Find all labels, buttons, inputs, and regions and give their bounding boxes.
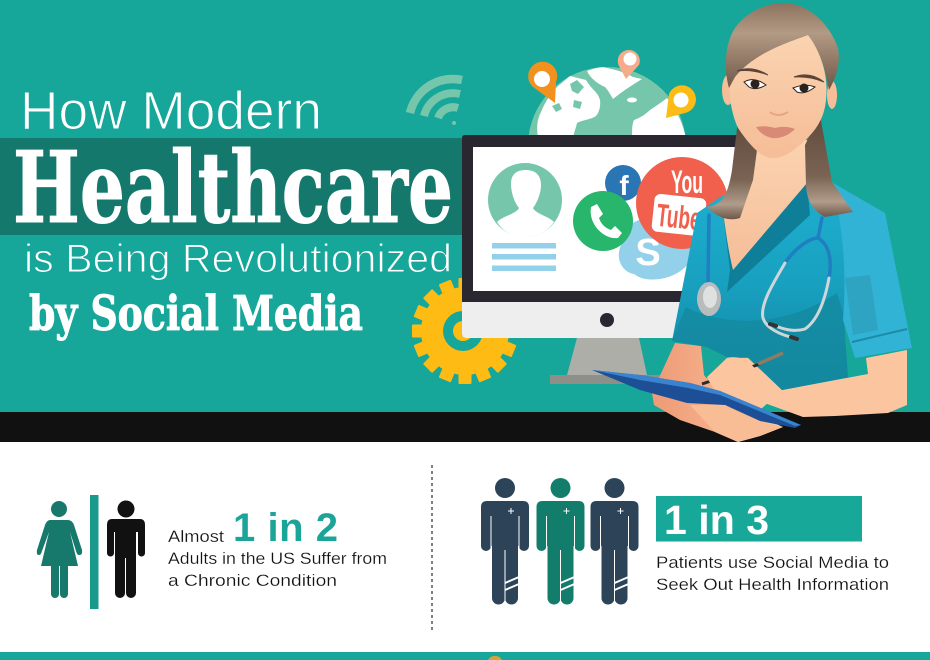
stat: 1 in 2: a Chronic Condition xyxy=(168,571,337,590)
divider xyxy=(431,465,433,630)
face xyxy=(729,35,827,158)
right arm xyxy=(707,350,907,417)
icon: location pin orange xyxy=(528,62,557,103)
icon: youtube: You xyxy=(671,164,703,200)
icon: patient 3 xyxy=(590,478,638,606)
monitor base xyxy=(550,375,670,384)
sleeve shade xyxy=(845,275,878,335)
scrub lower shade xyxy=(672,293,850,390)
left eyebrow xyxy=(737,69,768,75)
title xyxy=(13,81,453,342)
scrub torso xyxy=(672,180,890,390)
stat box: 1 in 3: 1 in 3 xyxy=(664,497,769,543)
stat: 1 in 2: Adults in the US Suffer from xyxy=(168,549,387,568)
icon: youtube: Tube xyxy=(655,197,703,237)
icon: skype: S xyxy=(635,232,661,274)
title: How Modern xyxy=(20,81,322,141)
header background xyxy=(0,0,930,413)
profile text lines xyxy=(492,243,556,271)
hair xyxy=(726,3,839,90)
icon: skype xyxy=(619,218,690,279)
icon: facebook xyxy=(605,165,641,201)
lips xyxy=(756,126,795,138)
stat text: patients: Seek Out Health Information xyxy=(656,575,889,594)
writing hand xyxy=(707,357,780,410)
icon: man xyxy=(107,500,145,598)
icon: patient 1 xyxy=(481,478,529,606)
stethoscope tubes xyxy=(708,215,830,339)
collar xyxy=(722,183,810,292)
right eyebrow xyxy=(794,75,824,82)
left arm xyxy=(652,343,783,442)
icon: location pin yellow xyxy=(666,85,696,118)
icon: facebook: f xyxy=(619,170,629,201)
bottom teal strip xyxy=(0,652,930,660)
monitor screen xyxy=(473,147,740,291)
left hair strand xyxy=(707,120,757,219)
title: is Being Revolutionized xyxy=(24,237,452,281)
left eye xyxy=(744,80,766,89)
stat: 1 in 2: Almost xyxy=(168,527,224,546)
stat text: patients: Patients use Social Media to xyxy=(656,553,889,572)
monitor chin xyxy=(462,302,740,338)
stat: 1 in 2: 1 in 2 xyxy=(233,506,338,550)
stat: 1 in 2 xyxy=(168,506,387,590)
icon: location pin peach xyxy=(618,50,640,79)
left ear xyxy=(722,75,734,105)
nurse xyxy=(592,3,912,442)
monitor body xyxy=(462,135,740,338)
clipboard xyxy=(592,370,801,428)
stat box: 1 in 3 xyxy=(656,496,862,543)
icon: youtube xyxy=(636,157,728,249)
icon: globe xyxy=(528,67,686,225)
nose xyxy=(770,112,788,115)
icon: woman xyxy=(37,501,82,598)
power button xyxy=(600,313,614,327)
bottom strip pin fragment xyxy=(488,656,502,660)
sleeve cuff line xyxy=(852,329,907,342)
stethoscope chest piece xyxy=(697,282,721,316)
neck xyxy=(722,140,807,270)
right sleeve xyxy=(833,183,912,358)
stat text: patients xyxy=(656,553,889,594)
monitor xyxy=(462,135,740,384)
icon: wifi xyxy=(410,79,462,125)
icon: gear xyxy=(412,278,518,384)
monitor stand xyxy=(567,338,647,375)
right eye xyxy=(793,84,815,93)
right ear xyxy=(827,81,837,109)
title: Healthcare xyxy=(13,131,453,246)
icon: patient 2 xyxy=(536,478,584,606)
pen xyxy=(702,353,783,384)
icon: phone xyxy=(573,191,633,251)
vertical bar xyxy=(90,495,98,609)
title banner xyxy=(0,138,463,235)
icon: profile avatar xyxy=(488,163,562,237)
black band under header xyxy=(0,412,930,442)
title: by Social Media xyxy=(29,286,363,342)
white content panel xyxy=(0,442,930,652)
right hair strand xyxy=(805,115,853,217)
background wedge between torso and arm xyxy=(844,320,867,377)
holding hand fingers xyxy=(690,405,783,442)
